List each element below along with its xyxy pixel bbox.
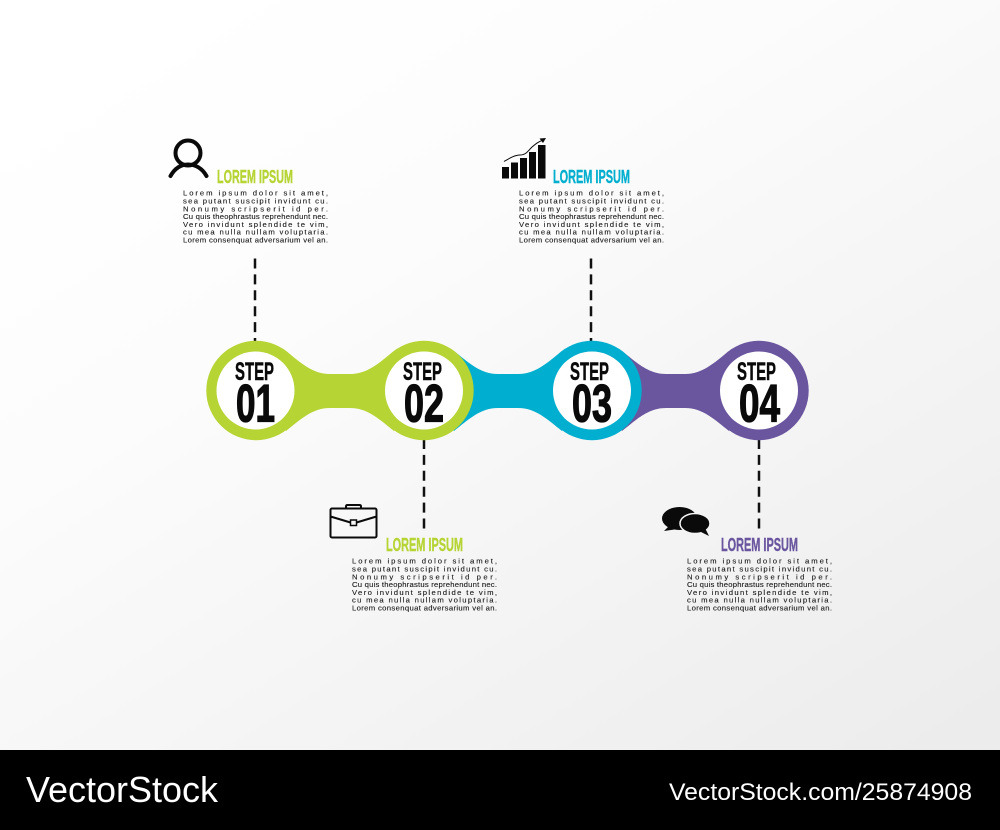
icon: person [170, 140, 206, 176]
text block: step 02 [352, 535, 497, 612]
body: step 01: Nonumy scripserit id per. [183, 204, 328, 214]
body: step 02: Cu quis theophrastus reprehendunt nec. [352, 580, 497, 589]
step 02 label: STEP [403, 358, 442, 386]
step 02 label: 02 [404, 374, 444, 434]
heading: step 01: LOREM IPSUM [217, 167, 293, 187]
step 04 label: STEP [737, 358, 776, 386]
body: step 04: sea putant suscipit invidunt cu. [687, 564, 832, 574]
body: step 02 [352, 556, 497, 612]
step 03 label [570, 358, 612, 434]
step 04 label [737, 358, 780, 434]
step 03 label: 03 [572, 374, 612, 434]
text block: step 01 [183, 167, 328, 244]
body: step 01: sea putant suscipit invidunt cu. [183, 196, 328, 206]
heading: step 03: LOREM IPSUM [553, 167, 630, 187]
footer url text: VectorStock.com/25874908 [669, 779, 972, 806]
body: step 01: Cu quis theophrastus reprehendunt nec. [183, 212, 328, 221]
body: step 03: Lorem ipsum dolor sit amet, [519, 188, 664, 198]
body: step 02: Vero invidunt splendide te vim, [352, 588, 497, 597]
text block: step 04 [687, 535, 832, 612]
step chain [206, 341, 809, 440]
icon: briefcase [330, 505, 376, 538]
connector: dashed leader lines [255, 258, 759, 530]
step 01 label: STEP [235, 358, 274, 386]
body: step 03 [519, 188, 664, 244]
body: step 01: cu mea nulla nullam voluptaria. [183, 228, 328, 237]
step 01 node [206, 341, 306, 440]
body: step 03: Nonumy scripserit id per. [519, 204, 664, 214]
step 04 label: 04 [739, 374, 780, 434]
icon: bar chart with arrow [502, 138, 546, 178]
step 03 node [424, 341, 642, 440]
body: step 03: cu mea nulla nullam voluptaria. [519, 228, 664, 237]
body: step 04: Lorem consenquat adversarium vel an. [687, 603, 832, 612]
step 02 label [403, 358, 444, 434]
body: step 01: Vero invidunt splendide te vim, [183, 220, 328, 229]
body: step 01 [183, 188, 328, 244]
body: step 01: Lorem ipsum dolor sit amet, [183, 188, 328, 198]
body: step 03: Lorem consenquat adversarium vel an. [519, 235, 664, 244]
body: step 02: Nonumy scripserit id per. [352, 572, 497, 582]
step 01 label [235, 358, 275, 434]
body: step 02: Lorem consenquat adversarium vel an. [352, 603, 497, 612]
body: step 03: Vero invidunt splendide te vim, [519, 220, 664, 229]
heading: step 04: LOREM IPSUM [721, 535, 798, 555]
body: step 02: cu mea nulla nullam voluptaria. [352, 596, 497, 605]
footer bar [0, 750, 1000, 830]
body: step 04: Vero invidunt splendide te vim, [687, 588, 832, 597]
body: step 04: Lorem ipsum dolor sit amet, [687, 556, 832, 566]
body: step 04: Nonumy scripserit id per. [687, 572, 832, 582]
icon: speech bubbles [662, 507, 710, 536]
footer logo text: VectorStock [26, 769, 219, 810]
body: step 04 [687, 556, 832, 612]
heading: step 02: LOREM IPSUM [386, 535, 463, 555]
step 02 node [256, 341, 474, 440]
body: step 02: sea putant suscipit invidunt cu. [352, 564, 497, 574]
body: step 02: Lorem ipsum dolor sit amet, [352, 556, 497, 566]
step 03 label: STEP [570, 358, 609, 386]
text block: step 03 [519, 167, 664, 244]
body: step 03: sea putant suscipit invidunt cu. [519, 196, 664, 206]
body: step 01: Lorem consenquat adversarium vel an. [183, 235, 328, 244]
body: step 03: Cu quis theophrastus reprehendunt nec. [519, 212, 664, 221]
step 01 label: 01 [236, 374, 275, 434]
body: step 04: Cu quis theophrastus reprehendunt nec. [687, 580, 832, 589]
body: step 04: cu mea nulla nullam voluptaria. [687, 596, 832, 605]
step 04 node [592, 341, 809, 440]
